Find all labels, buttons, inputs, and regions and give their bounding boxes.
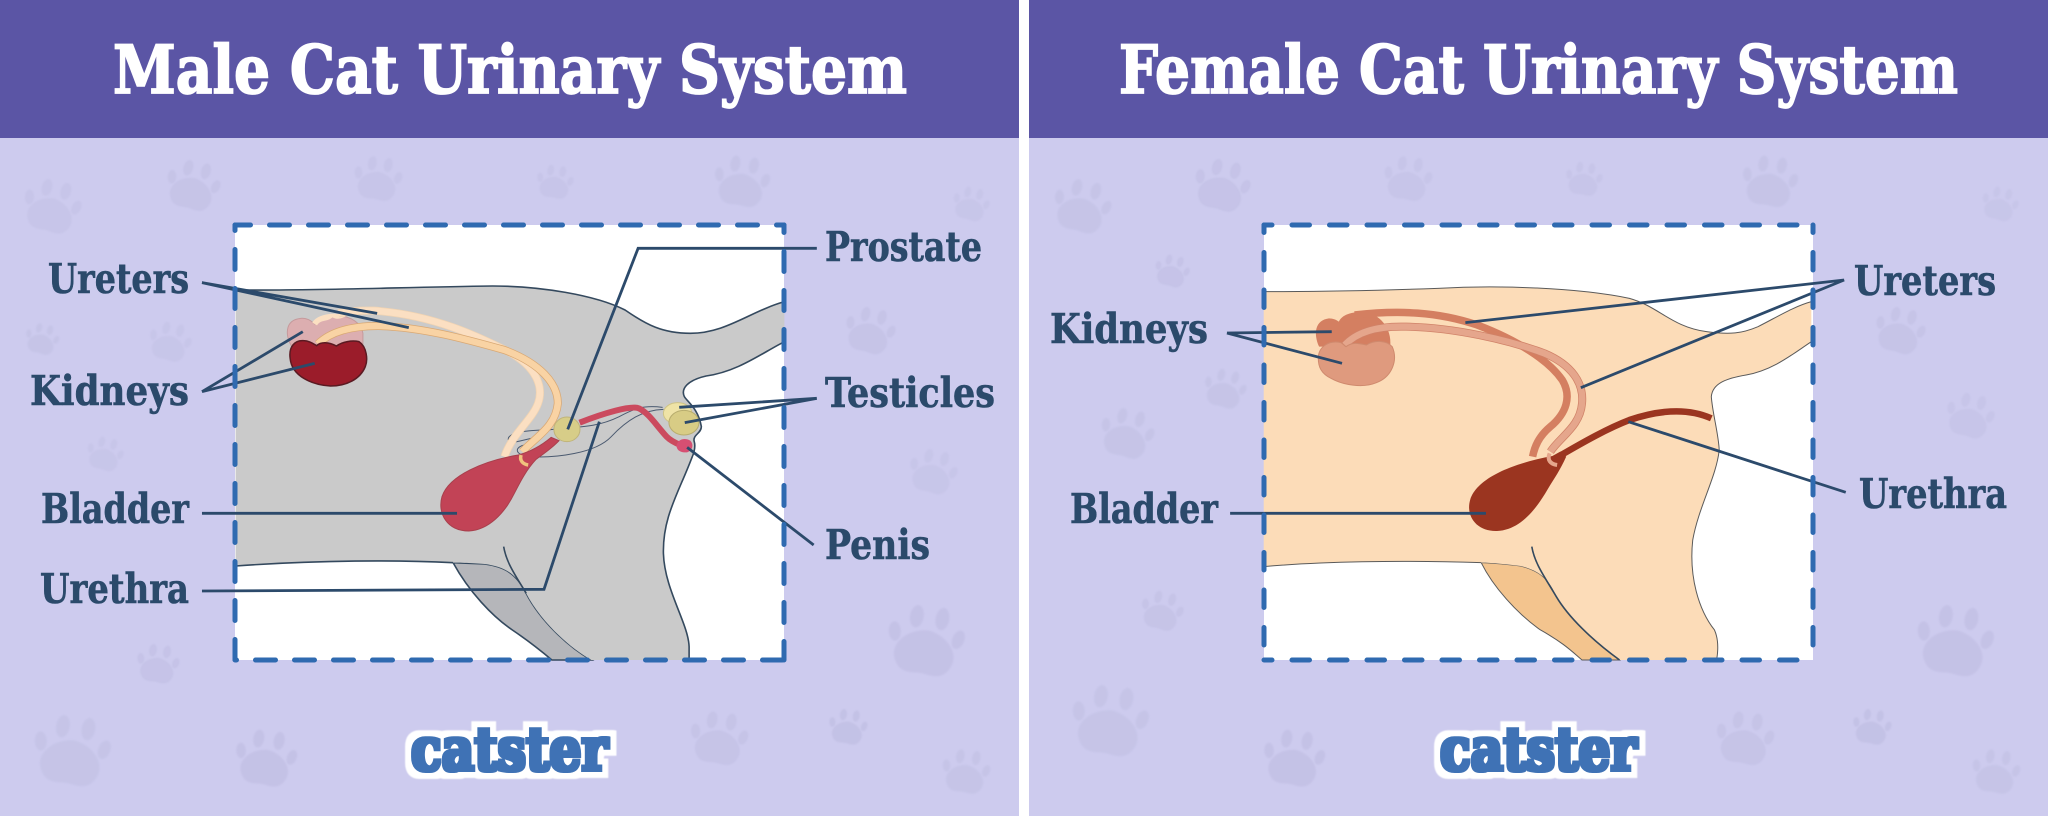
label: urethra: Urethra xyxy=(1859,470,2007,518)
label: prostate: Prostate xyxy=(825,223,982,271)
dashed frame border xyxy=(1264,225,1813,660)
kidney highlight xyxy=(312,314,347,325)
label: kidneys: Kidneys xyxy=(1050,305,1208,353)
label: kidneys: Kidneys xyxy=(30,367,189,415)
header bar xyxy=(0,0,1019,138)
body outline xyxy=(236,286,784,660)
leader lines xyxy=(202,248,817,591)
label: urethra: Urethra xyxy=(40,565,189,613)
prostate xyxy=(554,417,580,442)
bladder xyxy=(441,437,559,531)
logo: catster: catster xyxy=(411,715,609,785)
thin connecting ducts xyxy=(508,407,663,457)
penis xyxy=(676,439,692,452)
diagram frame xyxy=(1264,225,1813,660)
testicles xyxy=(663,403,699,435)
paw print background pattern xyxy=(16,151,994,796)
label: ureters: Ureters xyxy=(1854,257,1996,305)
label: testicles: Testicles xyxy=(825,369,995,417)
ureters xyxy=(1345,312,1582,457)
label: ureters: Ureters xyxy=(48,255,189,303)
front kidney xyxy=(1318,341,1394,386)
urethra xyxy=(580,408,680,445)
panel: female cat urinary system xyxy=(1029,0,2048,816)
front kidney xyxy=(290,341,367,386)
header bar xyxy=(1029,0,2048,138)
diagram frame xyxy=(235,225,784,660)
leader lines xyxy=(1227,280,1846,513)
cat body xyxy=(1264,287,1811,660)
paw print background pattern xyxy=(1046,151,2024,796)
title: Male Cat Urinary System xyxy=(113,31,907,109)
dashed frame border xyxy=(235,225,784,660)
body outline xyxy=(1264,287,1811,660)
ureter hook xyxy=(1549,453,1557,465)
cat body xyxy=(236,286,784,660)
panel: male cat urinary system xyxy=(0,0,1019,816)
ureter hook xyxy=(521,455,528,465)
ureters xyxy=(318,311,558,457)
urethra xyxy=(1558,411,1711,457)
diagram: female cat anatomy xyxy=(1227,280,1846,660)
diagram: male cat anatomy xyxy=(202,248,817,660)
label: bladder: Bladder xyxy=(41,485,190,533)
label: penis: Penis xyxy=(825,521,930,569)
far hind leg xyxy=(1481,563,1620,660)
logo: catster: catster xyxy=(1440,715,1638,785)
bladder xyxy=(1469,452,1566,531)
label: bladder: Bladder xyxy=(1070,485,1219,533)
far hind leg xyxy=(453,563,591,660)
back kidney xyxy=(287,315,363,348)
back kidney xyxy=(1316,312,1390,347)
